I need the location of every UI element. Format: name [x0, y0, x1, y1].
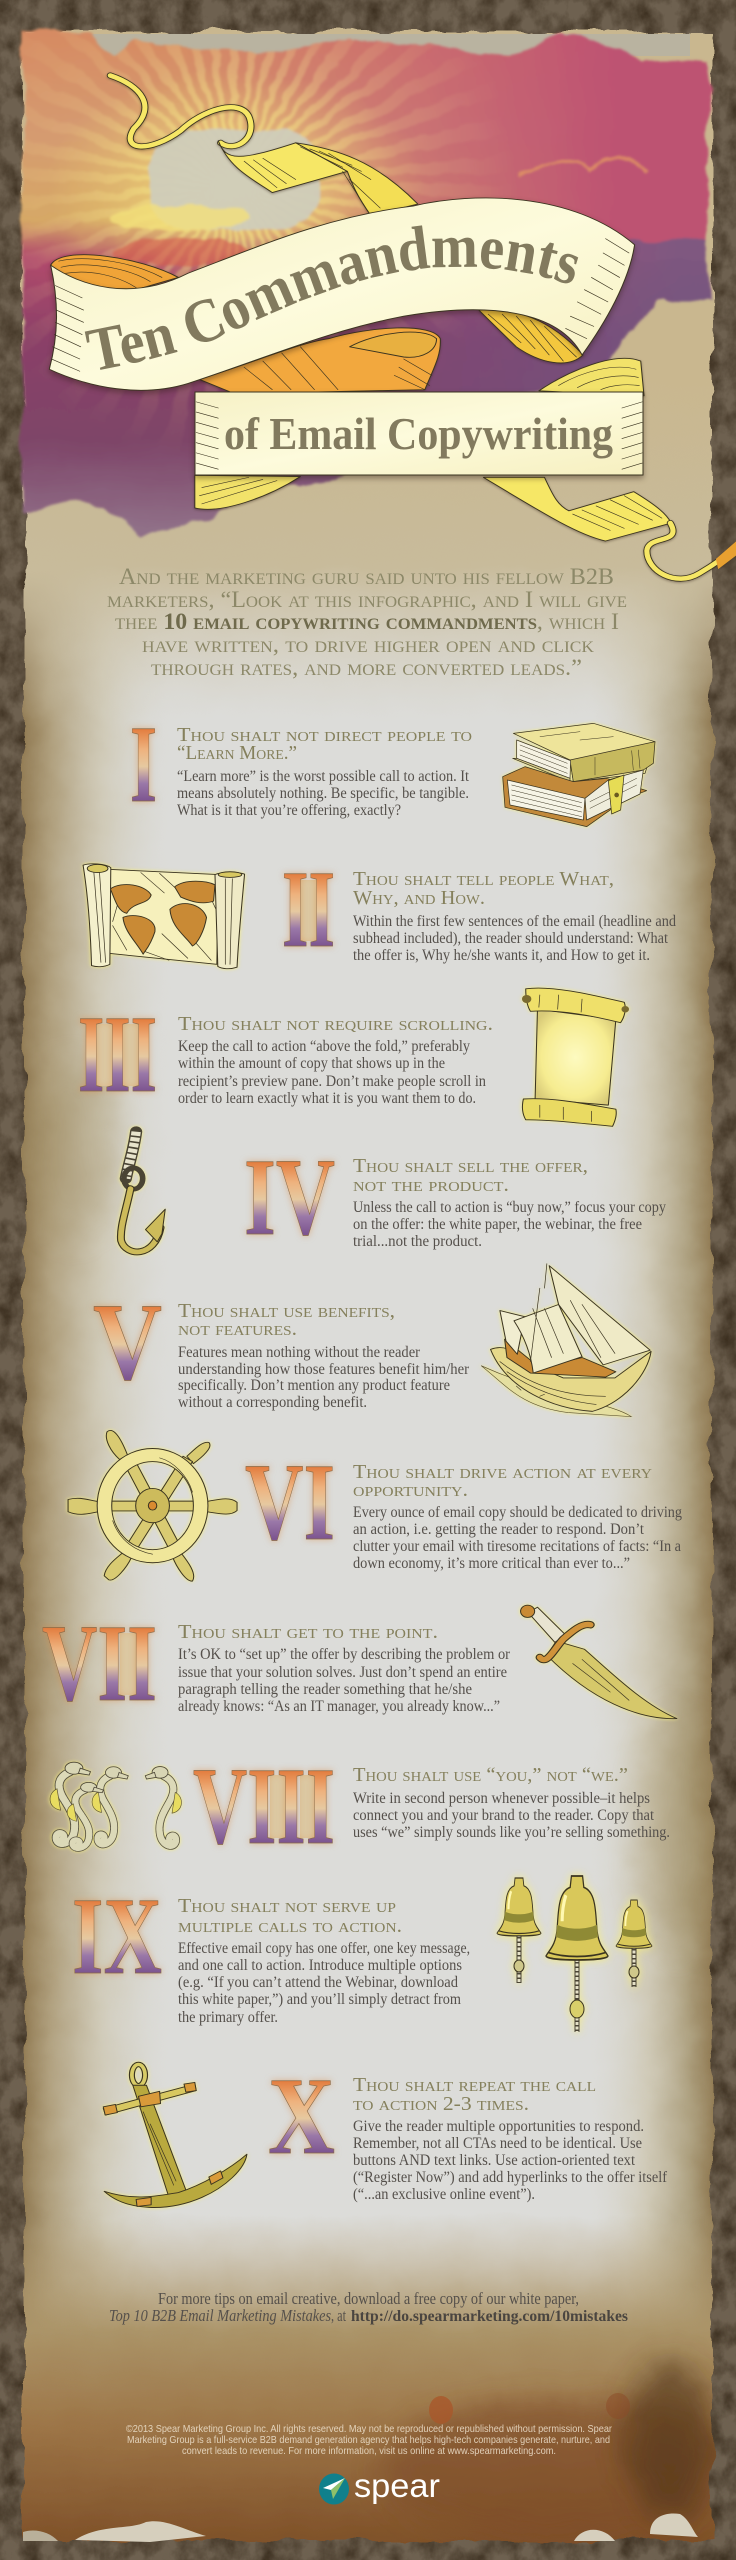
- panel: commandment IV: [121, 1132, 666, 1258]
- icon: seahorses: [50, 1762, 181, 1848]
- intro text: marketers, “Look at this infographic, and I will give: [107, 587, 627, 612]
- body text VI: [353, 1504, 682, 1572]
- body text III: Keep the call to action “above the fold,” preferably: [178, 1038, 470, 1055]
- icon: spear arrow: [319, 2474, 349, 2504]
- heading VIII: Thou shalt use “you,” not “we.”: [353, 1765, 628, 1786]
- panel: commandment X: [103, 2055, 668, 2207]
- body text II: [353, 913, 676, 964]
- body text IX: this white paper,”) and you’ll simply detract from: [178, 1991, 461, 2008]
- copyright notice: ©2013 Spear Marketing Group Inc. All rights reserved. May not be reproduced or republished without permission. Spear: [126, 2423, 612, 2435]
- body text X: Remember, not all CTAs need to be identical. Use: [353, 2135, 642, 2152]
- body text II: Within the first few sentences of the email (headline and: [353, 913, 676, 930]
- intro text: have written, to drive higher open and click: [142, 632, 594, 657]
- body text VI: Every ounce of email copy should be dedicated to driving: [353, 1504, 682, 1521]
- heading VI: [353, 1462, 652, 1501]
- call to action: white paper: For more tips on email creative, download a free copy of our white paper,: [158, 2289, 579, 2308]
- call to action: white paper: , at: [331, 2306, 346, 2325]
- intro text: through rates, and more converted leads.”: [151, 655, 582, 680]
- panel: commandment IX: [72, 1875, 652, 2032]
- body text I: means absolutely nothing. Be specific, be tangible.: [177, 785, 469, 802]
- numeral I: I: [130, 703, 157, 825]
- icon: three bells: [497, 1876, 652, 2032]
- body text VII: [178, 1646, 511, 1715]
- body text IX: the primary offer.: [178, 2009, 278, 2026]
- heading I: Thou shalt not direct people to: [177, 725, 472, 746]
- heading IV: [353, 1156, 588, 1196]
- numeral VII: VII: [42, 1602, 157, 1724]
- heading II: [353, 869, 614, 909]
- heading VII: Thou shalt get to the point.: [178, 1622, 438, 1643]
- title banner with ribbons: [48, 72, 736, 584]
- heading I: “Learn More.”: [177, 743, 297, 764]
- body text III: order to learn exactly what it is you want them to do.: [178, 1090, 476, 1107]
- call to action: white paper: Top 10 B2B Email Marketing Mistakes: [109, 2306, 331, 2325]
- body text III: recipient’s preview pane. Don’t make people scroll in: [178, 1073, 486, 1090]
- heading I: [177, 725, 472, 764]
- body text X: (“...an exclusive online event”).: [353, 2186, 535, 2203]
- intro text: And the marketing guru said unto his fellow B2B: [119, 564, 614, 589]
- wordmark: spear: [354, 2467, 440, 2504]
- panel: commandment VIII: [50, 1745, 670, 1867]
- body text IX: Effective email copy has one offer, one key message,: [178, 1940, 470, 1957]
- banner: of Email Copywriting: [195, 392, 643, 475]
- body text II: the offer is, Why he/she wants it, and How to get it.: [353, 947, 650, 964]
- numeral VIII: VIII: [193, 1745, 335, 1867]
- body text VII: issue that your solution solves. Just don’t spend an entire: [178, 1664, 507, 1681]
- heading X: Thou shalt repeat the call: [353, 2075, 596, 2096]
- icon: dagger: [521, 1605, 677, 1719]
- body text VIII: connect you and your brand to the reader. Copy that: [353, 1807, 655, 1824]
- body text VI: an action, i.e. getting the reader to respond. Don’t: [353, 1521, 645, 1538]
- heading V: Thou shalt use benefits,: [178, 1301, 395, 1322]
- body text VII: It’s OK to “set up” the offer by describing the problem or: [178, 1646, 511, 1663]
- panel: commandment II: [83, 848, 676, 970]
- icon: sailing ship: [481, 1264, 651, 1417]
- body text V: without a corresponding benefit.: [178, 1394, 367, 1411]
- body text X: [353, 2118, 668, 2203]
- panel: commandment VI: [68, 1430, 682, 1581]
- heading IX: multiple calls to action.: [178, 1916, 402, 1937]
- body text IV: [353, 1199, 666, 1250]
- icon: anchor: [103, 2064, 247, 2207]
- heading VI: opportunity.: [353, 1480, 468, 1501]
- heading X: [353, 2075, 596, 2115]
- body text III: within the amount of copy that shows up in the: [178, 1055, 445, 1072]
- body text V: understanding how those features benefit him/her: [178, 1361, 470, 1378]
- body text I: “Learn more” is the worst possible call to action. It: [177, 768, 469, 785]
- heading IV: Thou shalt sell the offer,: [353, 1156, 588, 1177]
- body text X: buttons AND text links. Use action-oriented text: [353, 2152, 635, 2169]
- heading X: to action 2-3 times.: [353, 2094, 529, 2115]
- body text V: Features mean nothing without the reader: [178, 1344, 421, 1361]
- banner: of Email Copywriting: of Email Copywriting: [224, 408, 613, 459]
- heading V: not features.: [178, 1319, 297, 1340]
- body text VII: already knows: “As an IT manager, you already know...”: [178, 1698, 500, 1715]
- heading II: Thou shalt tell people What,: [353, 869, 614, 890]
- logo: spear: [319, 2467, 440, 2504]
- heading IX: [178, 1896, 402, 1937]
- intro text: [107, 564, 627, 680]
- body text IX: (e.g. “If you can’t attend the Webinar, download: [178, 1974, 458, 1991]
- copyright notice: [126, 2423, 612, 2457]
- body text V: [178, 1344, 470, 1411]
- icon: books: [503, 723, 655, 827]
- panel: commandment V: [93, 1264, 651, 1417]
- banner: Ten Commandments: Ten Commandments: [84, 225, 578, 370]
- body text X: Give the reader multiple opportunities to respond.: [353, 2118, 644, 2135]
- intro text: thee 10 email copywriting commandments , which I: [115, 609, 619, 634]
- body text VIII: Write in second person whenever possible–it helps: [353, 1790, 650, 1807]
- body text V: specifically. Don’t mention any product feature: [178, 1377, 450, 1394]
- numeral V: V: [93, 1281, 162, 1403]
- numeral II: II: [282, 848, 335, 970]
- panel: commandment III: [78, 988, 629, 1126]
- icon: ship wheel: [68, 1430, 237, 1581]
- icon: world map scroll: [83, 864, 245, 969]
- panel: commandment I: [130, 703, 655, 827]
- numeral X: X: [268, 2055, 335, 2177]
- panel: commandment VII: [42, 1602, 677, 1724]
- heading V: [178, 1301, 395, 1340]
- icon: blank scroll: [522, 988, 629, 1126]
- ribbon: back folds of lower banner: [195, 358, 736, 579]
- heading III: Thou shalt not require scrolling.: [178, 1014, 493, 1035]
- call to action: white paper: http://do.spearmarketing.com/10mistakes: [351, 2308, 628, 2325]
- numeral III: III: [78, 993, 157, 1115]
- body text III: [178, 1038, 486, 1107]
- copyright notice: Marketing Group is a full-service B2B demand generation agency that helps high-tech companies generate, nurture, and: [127, 2434, 610, 2446]
- body text IX: and one call to action. Introduce multiple options: [178, 1957, 462, 1974]
- body text I: What is it that you’re offering, exactly?: [177, 802, 401, 819]
- heading VI: Thou shalt drive action at every: [353, 1462, 652, 1483]
- body text VI: down economy, it’s more critical than ever to...”: [353, 1555, 630, 1572]
- body text VII: paragraph telling the reader something that he/she: [178, 1681, 472, 1698]
- body text IX: [178, 1940, 470, 2026]
- body text I: [177, 768, 469, 819]
- numeral IV: IV: [244, 1136, 335, 1258]
- body text IV: on the offer: the white paper, the webinar, the free: [353, 1216, 642, 1233]
- heading II: Why, and How.: [353, 888, 485, 909]
- heading IV: not the product.: [353, 1175, 509, 1196]
- numeral IX: IX: [72, 1875, 162, 1997]
- body text IV: Unless the call to action is “buy now,” focus your copy: [353, 1199, 666, 1216]
- heading IX: Thou shalt not serve up: [178, 1896, 396, 1917]
- sunset sky: [20, 9, 720, 545]
- body text IV: trial...not the product.: [353, 1233, 482, 1250]
- body text VIII: [353, 1790, 670, 1841]
- copyright notice: convert leads to revenue. For more information, visit us online at www.spearmarketing.com.: [182, 2445, 556, 2457]
- body text VIII: uses “we” simply sounds like you’re selling something.: [353, 1824, 670, 1841]
- ribbon: upper yellow tail: [110, 75, 418, 215]
- body text VI: clutter your email with tiresome recitations of facts: “In a: [353, 1538, 681, 1555]
- body text II: subhead included), the reader should understand: What: [353, 930, 668, 947]
- call to action: white paper: [109, 2289, 628, 2325]
- ribbon: back folds of main banner: [51, 255, 583, 394]
- body text X: (“Register Now”) and add hyperlinks to the offer itself: [353, 2169, 668, 2186]
- icon: fish hook: [121, 1132, 165, 1252]
- numeral VI: VI: [245, 1441, 335, 1563]
